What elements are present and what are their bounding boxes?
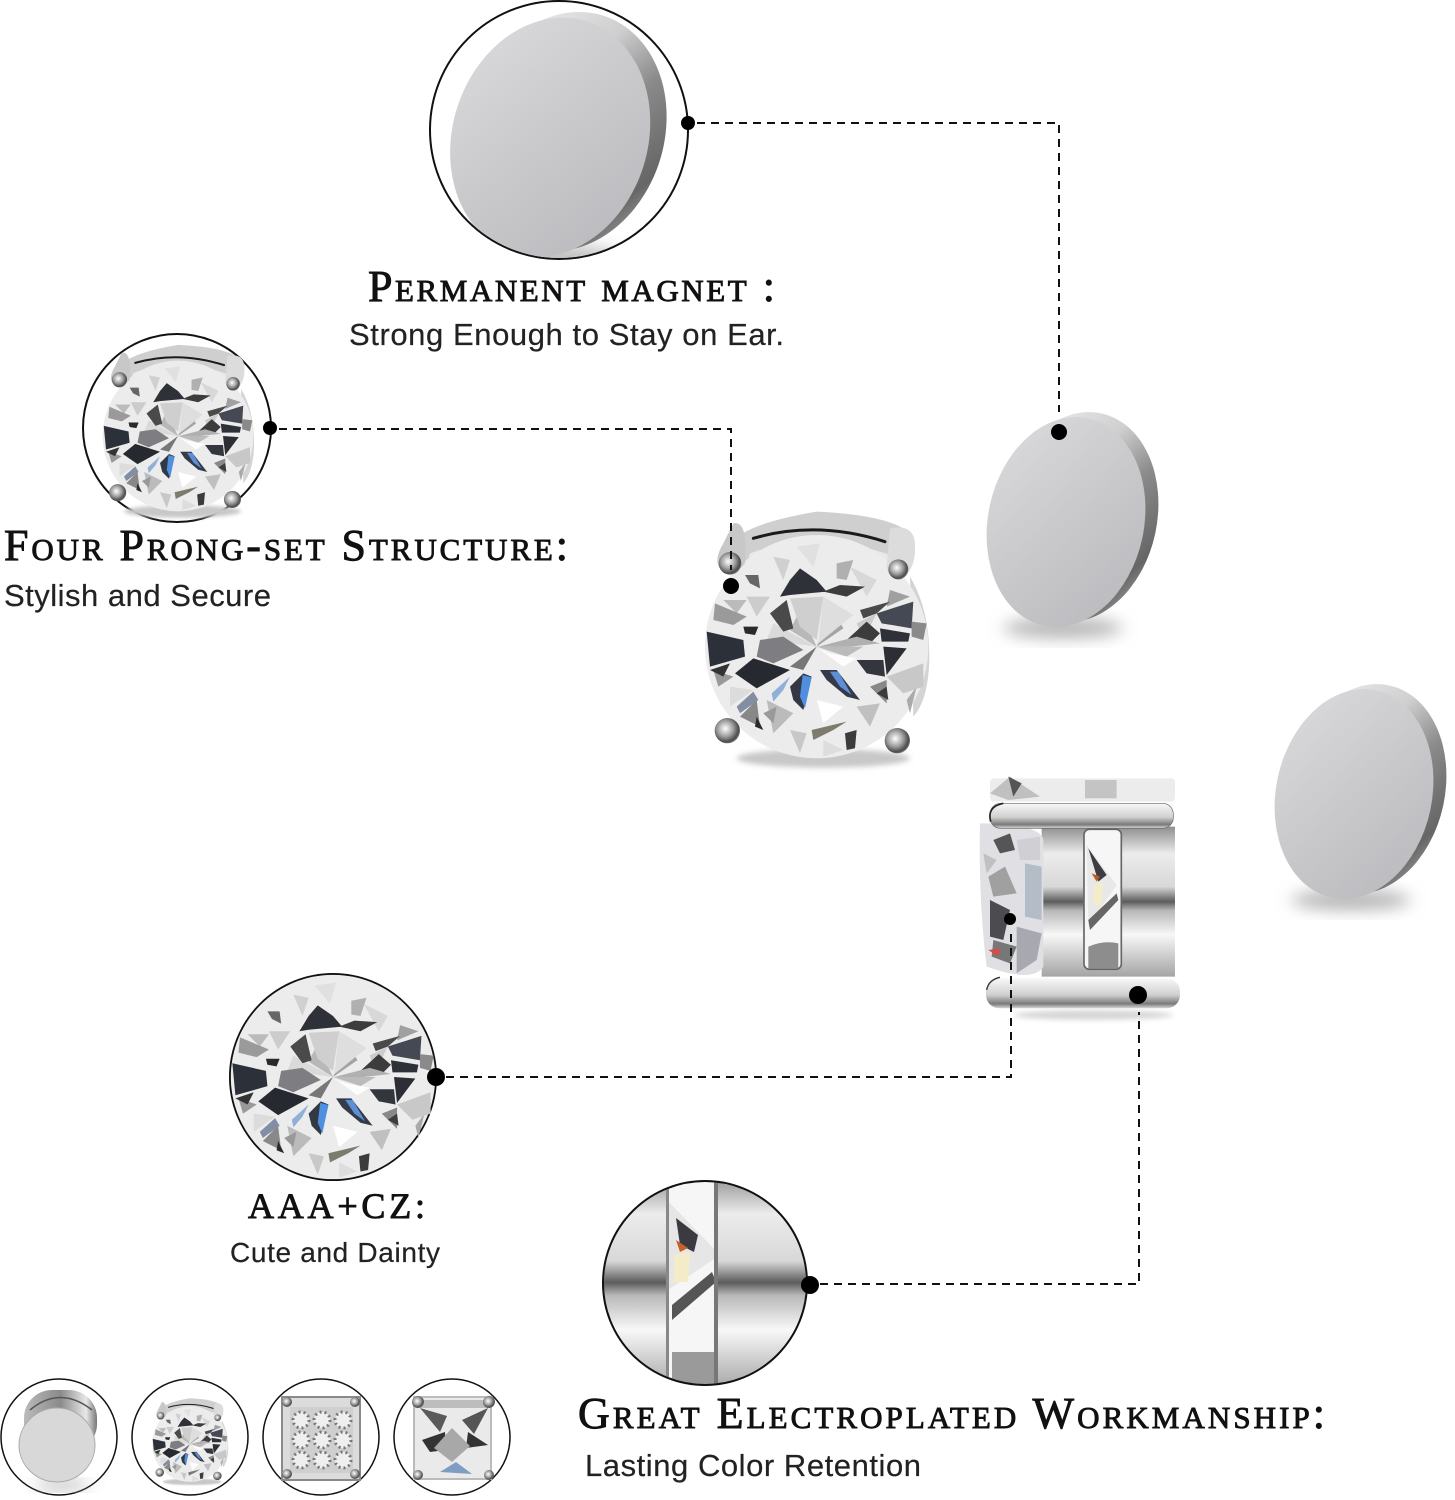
description: lasting color retention: Lasting Color Retention	[585, 1448, 921, 1483]
thumbnail: pave square stud	[263, 1379, 379, 1495]
leader: plating	[801, 986, 1147, 1294]
thumbnail: magnet	[1, 1379, 117, 1495]
leader: zirconia	[427, 913, 1016, 1086]
description: stylish and secure: Stylish and Secure	[4, 578, 271, 613]
callout: electroplated workmanship	[578, 1175, 1325, 1483]
product: side view stud	[980, 777, 1180, 1020]
cubic zirconia close-up circle	[230, 974, 436, 1180]
title: permanent magnet: Permanent magnet :	[368, 262, 775, 311]
thumbnail: round stud	[132, 1379, 248, 1495]
product: front view stud	[705, 512, 929, 768]
title: great electroplated workmanship: Great Electroplated Workmanship:	[578, 1389, 1325, 1438]
product: magnet back, lower	[1256, 669, 1455, 914]
callout: four prong-set structure	[4, 334, 568, 613]
product: magnet back, upper	[968, 397, 1177, 642]
leader: prong	[263, 421, 739, 594]
title: four prong-set structure: Four Prong-set Structure:	[4, 521, 568, 570]
leader: magnet	[681, 116, 1067, 440]
prong close-up circle	[83, 334, 271, 522]
callout: AAA+CZ	[230, 974, 440, 1268]
plating close-up circle	[600, 1175, 808, 1390]
title: AAA+CZ: AAA+CZ:	[248, 1186, 425, 1226]
description: strong enough: Strong Enough to Stay on Ear.	[349, 317, 784, 352]
style options row	[1, 1379, 510, 1495]
magnet close-up circle	[426, 0, 690, 274]
callout: permanent magnet	[349, 0, 784, 352]
description: cute and dainty: Cute and Dainty	[230, 1237, 440, 1268]
thumbnail: princess cut stud	[394, 1379, 510, 1495]
